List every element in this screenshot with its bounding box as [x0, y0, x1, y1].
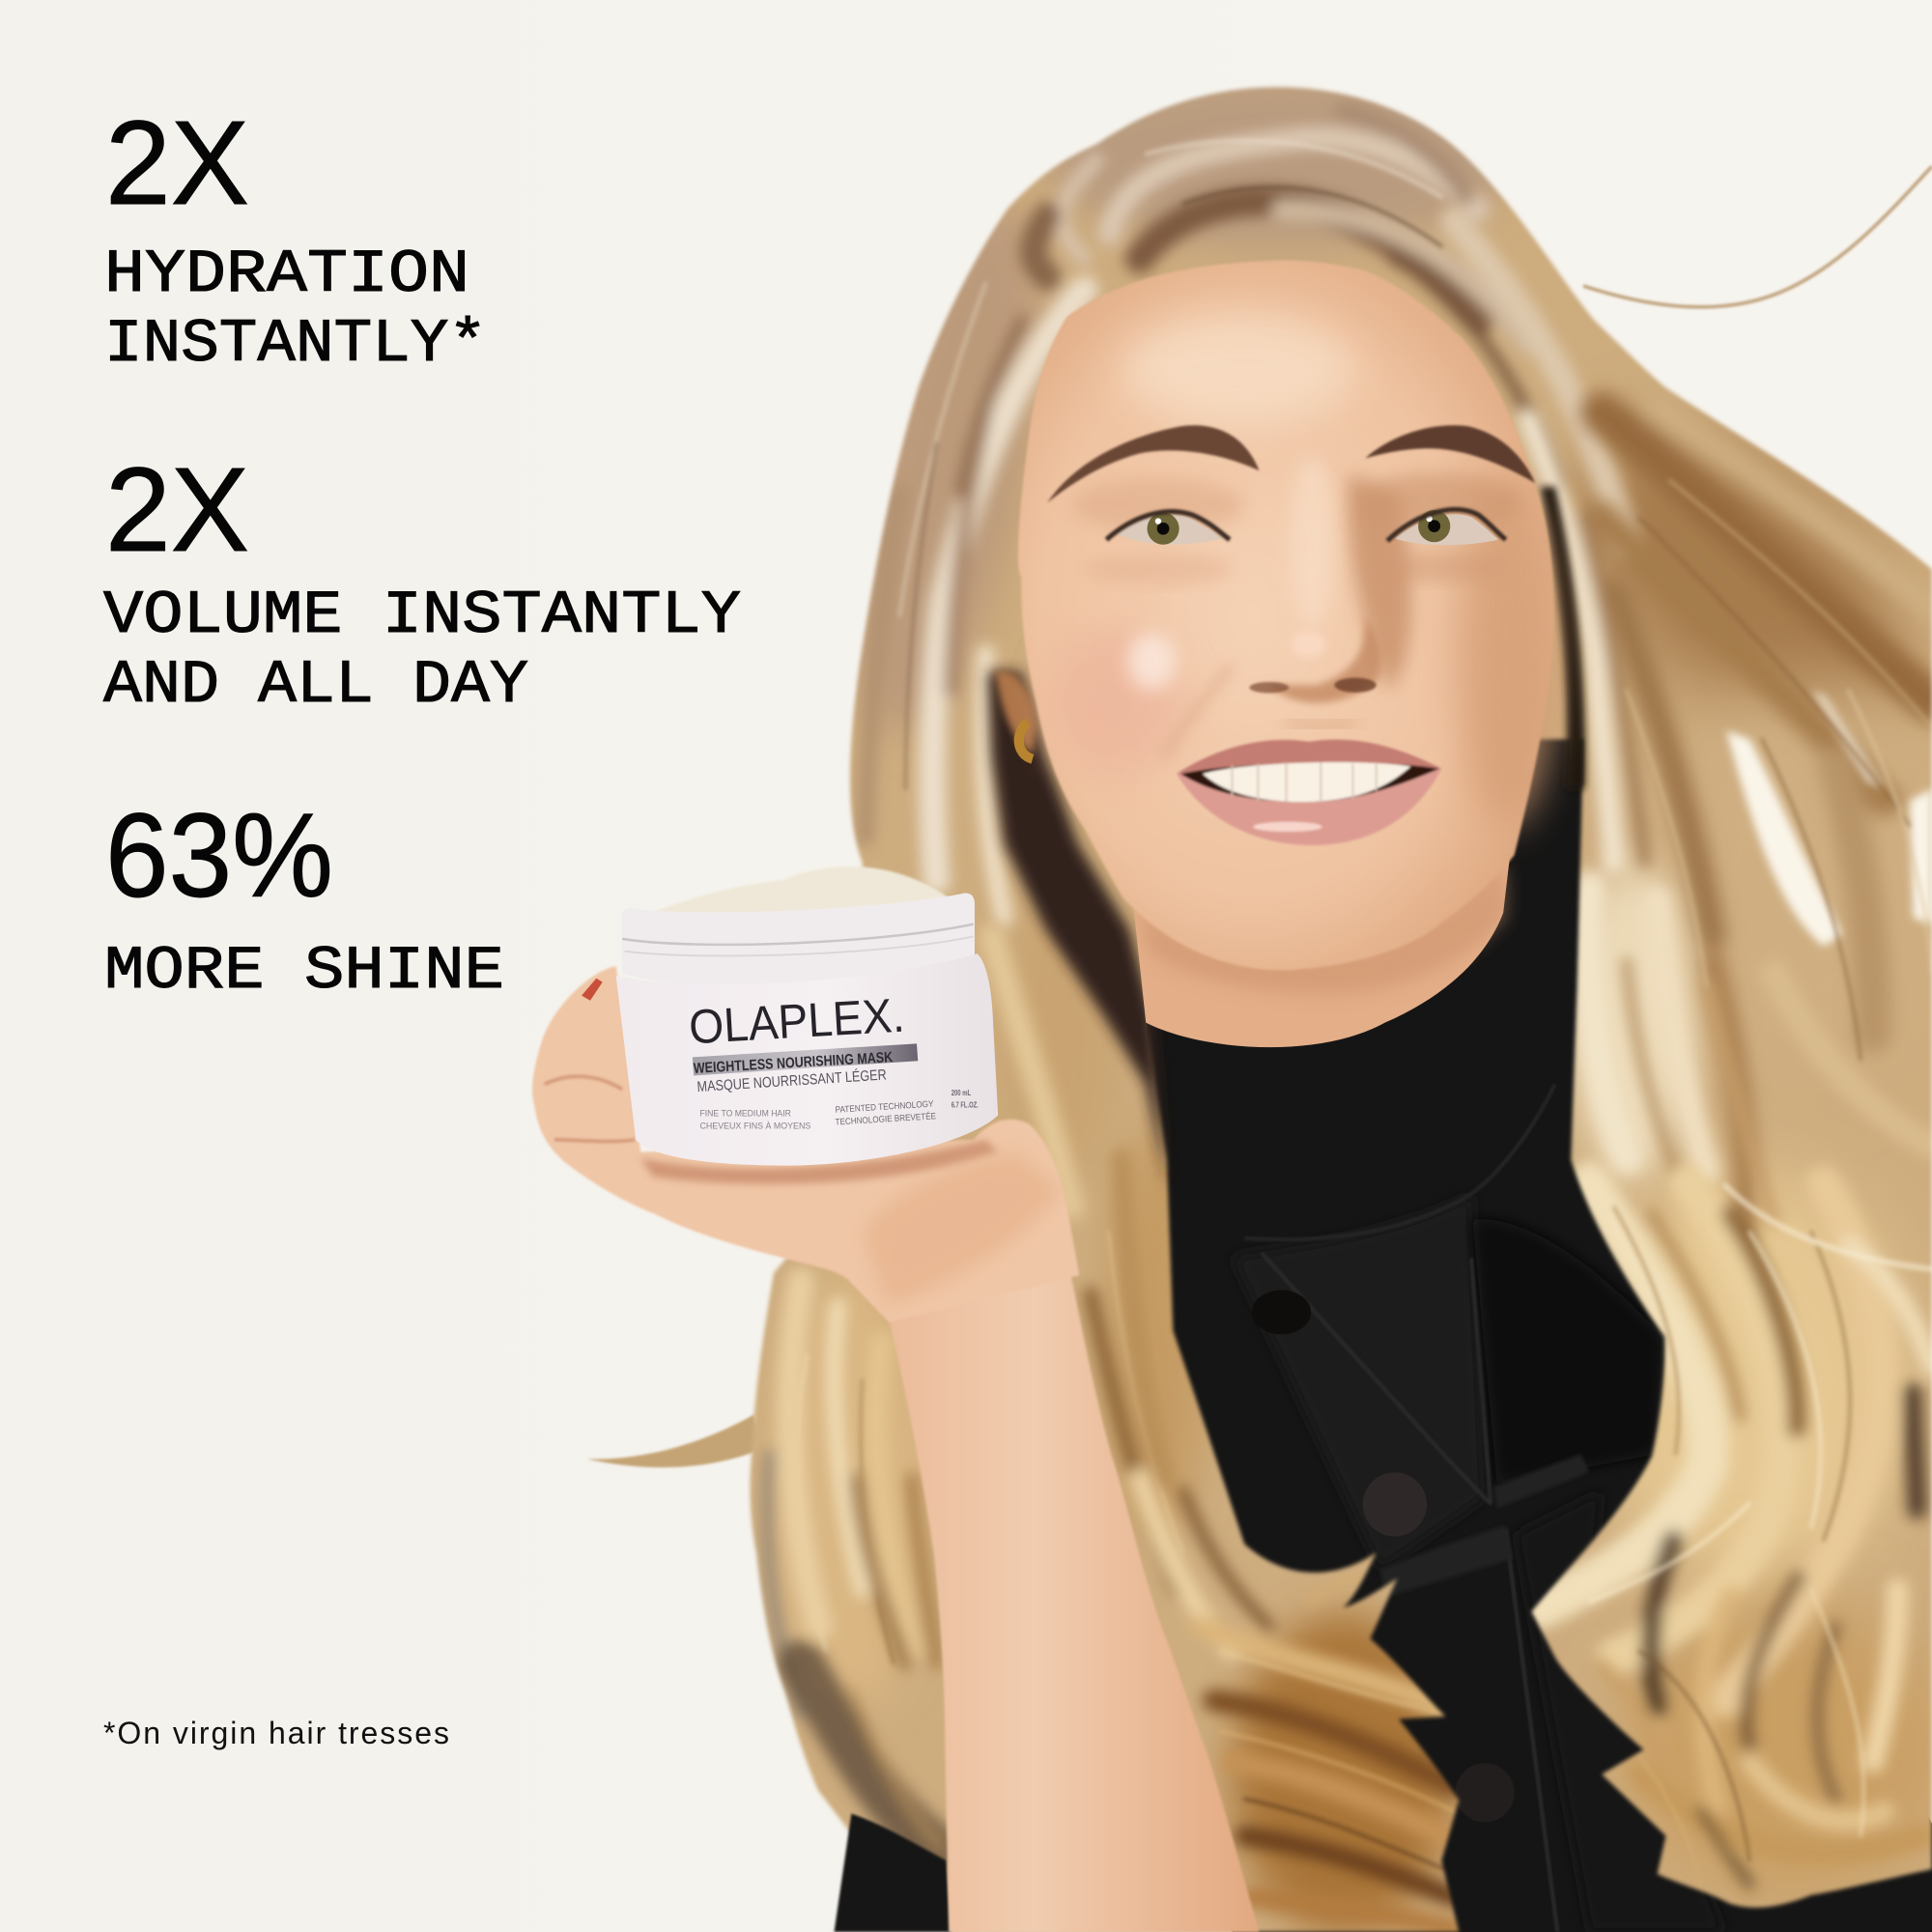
icon: collar button: [1252, 1290, 1311, 1334]
jar neck and rim: [622, 894, 975, 986]
number: 2X hydration: 2X: [105, 98, 249, 230]
jar technology text: TECHNOLOGIE BREVETÉE: [835, 1111, 936, 1127]
neck shadow under the chin: [1140, 863, 1506, 995]
claim: volume: [103, 444, 741, 720]
right eye: [1387, 509, 1506, 545]
icon: lower jacket button: [1455, 1763, 1515, 1822]
footnote: *On virgin hair tresses: [103, 1716, 449, 1750]
flyaway hair strand: [1583, 166, 1932, 307]
mouth: [1177, 740, 1441, 845]
number: 2X volume: 2X: [105, 444, 249, 577]
label: hydration instantly: HYDRATION: [104, 241, 469, 309]
icon: jacket button: [1363, 1472, 1427, 1537]
hair tones: [770, 74, 1932, 1932]
jar size text: [952, 1088, 979, 1110]
jar technology text: PATENTED TECHNOLOGY: [835, 1099, 934, 1115]
product jar: [616, 867, 998, 1166]
jacket and turtleneck: [1146, 727, 1932, 1932]
photo: woman with blonde hair holding the jar: [531, 84, 1932, 1932]
ear: [996, 670, 1037, 754]
earring: [1019, 722, 1033, 759]
jar label bar: [693, 1043, 918, 1076]
hair: dark shadow beside the left cheek: [988, 671, 1168, 1189]
jar hair type text: [699, 1109, 810, 1130]
right eyebrow: [1365, 425, 1535, 483]
wisp of hair on the left: [586, 1414, 761, 1467]
claim: hydration: [104, 98, 487, 379]
hair highlights: [1726, 690, 1932, 947]
face: [1018, 261, 1555, 970]
hair: dark shadow beside the right cheek: [1540, 487, 1585, 788]
label: more shine: MORE SHINE: [104, 937, 504, 1006]
strands left of the arm: [767, 1282, 943, 1848]
fine strands: [798, 140, 1932, 1886]
nose: [1164, 616, 1381, 757]
hair: main mass: [739, 74, 1932, 1932]
jar product name: WEIGHTLESS NOURISHING MASK: [693, 1049, 894, 1077]
crown strands: [865, 111, 1627, 918]
jar size text: 200 mL: [952, 1088, 971, 1097]
neck: [1127, 850, 1511, 1047]
jar French name: MASQUE NOURRISSANT LÉGER: [696, 1066, 887, 1095]
forearm: [850, 1159, 1260, 1932]
number: 63%: 63%: [105, 790, 333, 923]
left eyebrow: [1047, 425, 1260, 502]
jar logo: OLAPLEX.: [688, 988, 906, 1054]
strands on the right: [798, 140, 1932, 1886]
label: volume instantly and all day: VOLUME INSTANTLY: [103, 582, 741, 650]
sleeve at the lower left: [835, 1814, 952, 1932]
strands around the arm: [992, 936, 1460, 1928]
jar cream: [639, 867, 952, 921]
fingernail: [582, 979, 603, 1001]
label: volume instantly and all day: AND ALL DAY: [103, 651, 528, 720]
jar body: [616, 953, 998, 1166]
claim: shine: [104, 790, 504, 1006]
label: hydration instantly: INSTANTLY*: [104, 310, 487, 379]
left eye: [1106, 512, 1230, 545]
jar hair type text: FINE TO MEDIUM HAIR: [699, 1109, 791, 1119]
hand: [532, 966, 1079, 1322]
jar hair type text: CHEVEUX FINS À MOYENS: [699, 1121, 810, 1130]
jar size text: 6.7 FL.OZ.: [952, 1100, 979, 1110]
label: volume instantly and all day: [103, 582, 741, 720]
label: hydration instantly: [104, 241, 487, 379]
jar technology text: [835, 1099, 936, 1127]
